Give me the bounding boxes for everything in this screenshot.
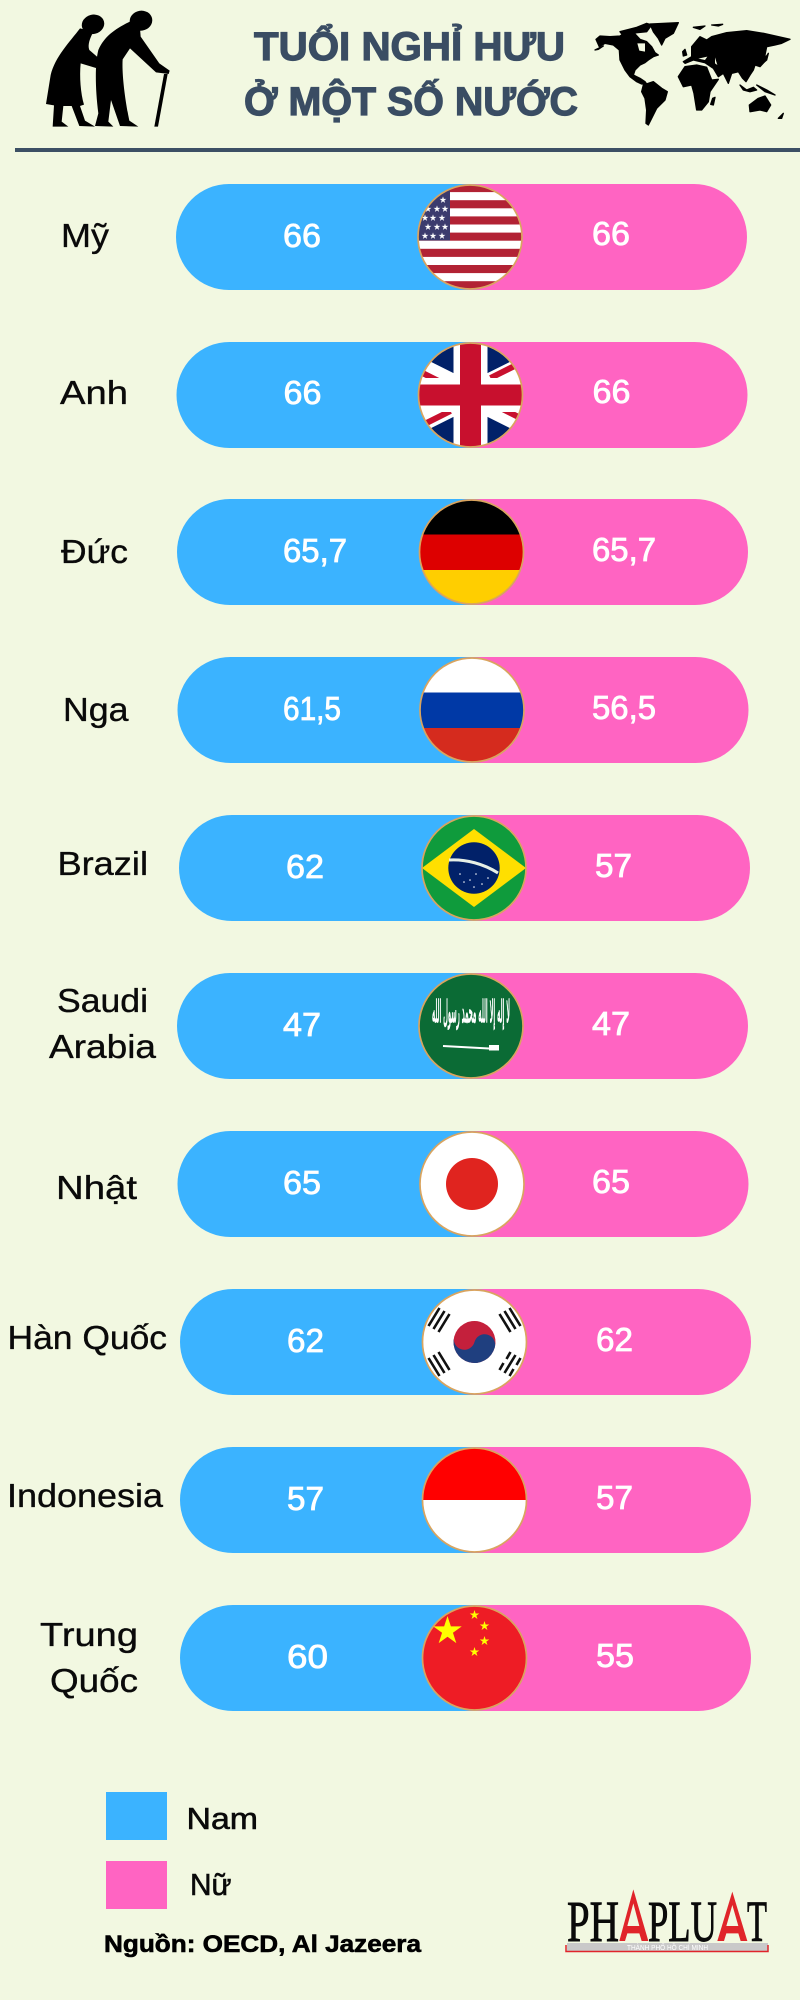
flag: UK <box>418 342 524 448</box>
title <box>244 22 578 124</box>
legend <box>106 1792 258 1909</box>
label: Đức <box>61 533 128 570</box>
value male: 61,5 <box>283 690 341 727</box>
value female: 65 <box>592 1163 630 1200</box>
label: Indonesia <box>7 1477 164 1514</box>
logo: Pháp Luật: THÀNH PHỐ HỒ CHÍ MINH <box>627 1942 708 1952</box>
bar <box>176 184 747 290</box>
label: Saudi <box>57 982 148 1019</box>
row: Brazil <box>58 815 750 921</box>
value male: 66 <box>284 374 322 411</box>
logo: Pháp Luật: PH <box>567 1889 619 1954</box>
value female: 66 <box>592 215 630 252</box>
value female: 57 <box>596 1479 633 1516</box>
flag: Germany <box>418 499 524 606</box>
value female: 47 <box>592 1005 630 1042</box>
legend swatch: Nữ <box>106 1861 167 1909</box>
value male: 62 <box>286 848 324 885</box>
row: Saudi Arabia <box>49 973 748 1079</box>
bar <box>177 973 748 1079</box>
label: Anh <box>60 374 128 411</box>
value female: 57 <box>595 847 632 884</box>
row: Trung Quốc <box>40 1605 751 1711</box>
icon: world map <box>595 23 790 125</box>
value male: 66 <box>283 217 321 254</box>
flag: South Korea <box>422 1289 528 1395</box>
value male: 47 <box>283 1006 321 1043</box>
flag: Japan <box>419 1131 525 1237</box>
row: Nga <box>63 657 748 764</box>
legend label: Nam: Nam <box>186 1801 258 1836</box>
label: Mỹ <box>61 217 110 254</box>
row: Hàn Quốc <box>8 1289 751 1395</box>
value male: 65 <box>283 1164 321 1201</box>
bar <box>178 1131 748 1237</box>
row: Indonesia <box>7 1447 751 1553</box>
bar <box>177 499 748 605</box>
source: Nguồn: OECD, Al Jazeera <box>104 1931 422 1958</box>
value female: 66 <box>592 373 630 410</box>
flag: China <box>422 1605 528 1711</box>
logo: Pháp Luật: PLU <box>648 1889 717 1954</box>
row: Saudi Arabia: Arabia <box>49 1028 157 1065</box>
title: TUỔI NGHỈ HƯU <box>254 22 565 69</box>
bar <box>180 1447 751 1553</box>
flag: Indonesia <box>422 1447 528 1553</box>
logo: Pháp Luật: T <box>747 1889 767 1954</box>
value male: 62 <box>287 1322 324 1359</box>
row: Đức <box>61 499 748 606</box>
icon: elderly couple with cane <box>46 9 170 127</box>
flag: Saudi Arabia <box>418 973 524 1079</box>
bar <box>179 815 750 921</box>
label: Brazil <box>58 845 148 882</box>
row: Anh <box>60 340 748 450</box>
row: Nhật <box>56 1131 748 1237</box>
bar <box>180 1605 751 1711</box>
flag: Brazil <box>421 815 527 921</box>
row: Trung Quốc: Quốc <box>50 1662 138 1699</box>
label: Nga <box>63 691 129 728</box>
value male: 65,7 <box>283 532 347 569</box>
value female: 55 <box>596 1637 634 1674</box>
value male: 60 <box>287 1638 328 1675</box>
flag: USA <box>417 184 523 290</box>
value female: 56,5 <box>592 689 656 726</box>
legend swatch: Nam <box>106 1792 167 1840</box>
label: Nhật <box>56 1169 137 1206</box>
bar <box>178 657 748 763</box>
flag: Russia <box>419 657 525 764</box>
bar <box>176 342 748 448</box>
flag: Saudi Arabia: لا إله إلا الله محمد رسول الله <box>432 994 510 1031</box>
value male: 57 <box>287 1480 324 1517</box>
row: Mỹ <box>61 184 747 290</box>
title: Ở MỘT SỐ NƯỚC <box>244 78 578 124</box>
logo: Pháp Luật <box>566 1889 768 1954</box>
value female: 65,7 <box>592 531 656 568</box>
legend label: Nữ: Nữ <box>190 1867 232 1902</box>
label: Trung <box>40 1616 138 1653</box>
value female: 62 <box>596 1321 633 1358</box>
divider <box>15 148 800 152</box>
label: Hàn Quốc <box>8 1319 167 1356</box>
bar <box>180 1289 751 1395</box>
